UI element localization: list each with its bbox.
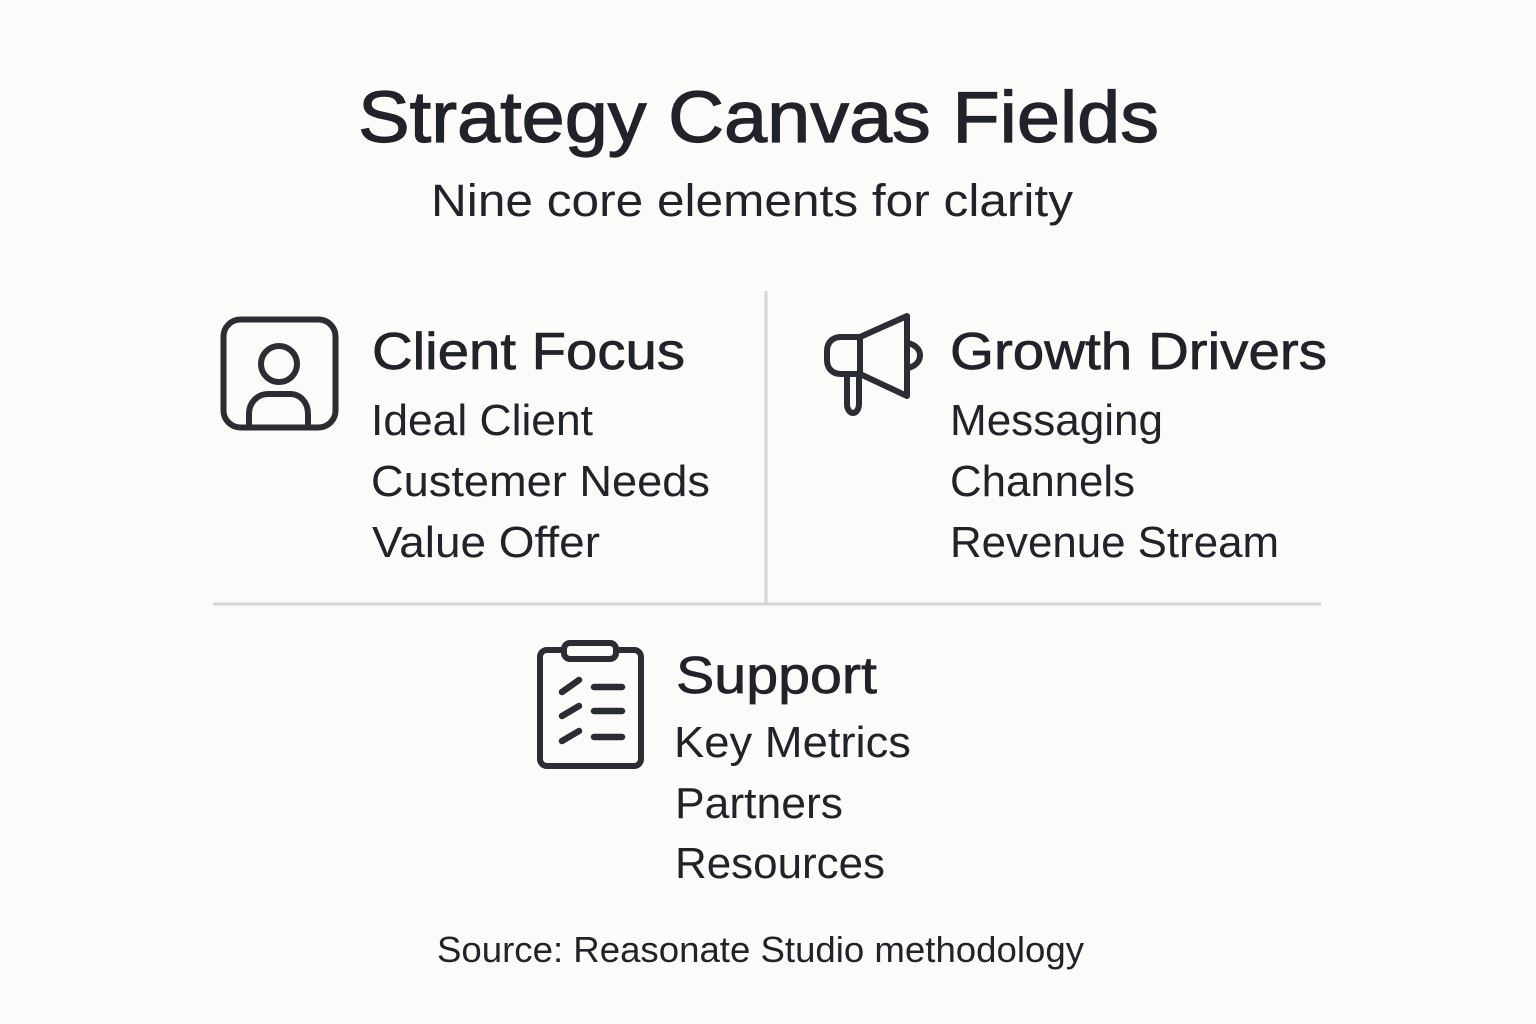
heading: client focus: Client Focus [372,323,685,381]
source note: Source: Reasonate Studio methodology [437,929,1084,970]
panel: support [540,643,911,888]
list: support items: Partners [675,779,843,828]
subtitle: Nine core elements for clarity [431,175,1074,226]
icon: megaphone [827,316,920,413]
heading: growth drivers: Growth Drivers [950,323,1327,381]
list: client focus items: Custemer Needs [371,457,710,506]
list: growth drivers items: Revenue Stream [950,518,1279,567]
list: support items: Key Metrics [674,718,911,767]
list: support items [674,718,911,888]
list: growth drivers items: Messaging [950,396,1163,445]
icon: client profile [224,320,336,428]
panel: client focus [224,320,710,567]
heading: support: Support [676,647,878,705]
list: client focus items: Value Offer [372,518,600,567]
list: client focus items: Ideal Client [371,396,593,445]
panel: growth drivers [827,316,1327,567]
list: growth drivers items: Channels [950,457,1135,506]
list: client focus items [371,396,710,567]
icon: clipboard checklist [540,643,641,766]
list: support items: Resources [675,839,885,888]
title: Strategy Canvas Fields [358,78,1159,158]
list: growth drivers items [950,396,1279,567]
